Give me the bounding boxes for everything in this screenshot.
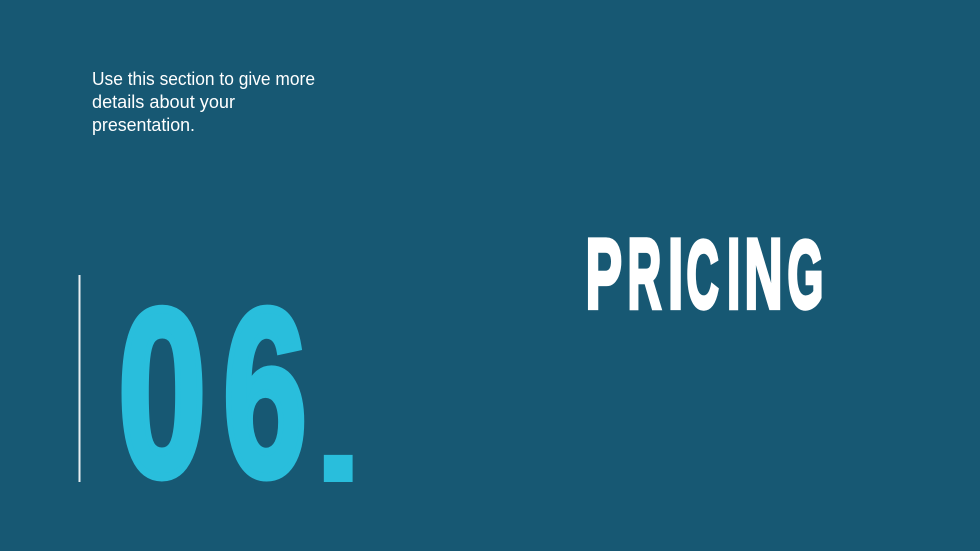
text block: section description: presentation.	[92, 115, 195, 135]
vertical divider line	[78, 275, 80, 482]
section number: 0	[118, 260, 206, 526]
section number	[118, 260, 367, 526]
heading: I	[727, 217, 740, 330]
section number: .	[310, 317, 367, 521]
section number: 6	[223, 261, 307, 526]
heading: C	[686, 220, 719, 328]
heading: P	[586, 219, 622, 330]
heading: I	[668, 219, 683, 330]
heading: N	[744, 218, 783, 329]
text block: section description: details about your	[92, 92, 235, 112]
heading	[586, 217, 823, 330]
text block: section description: Use this section to give more	[92, 69, 315, 89]
heading: G	[788, 221, 823, 328]
heading: R	[628, 220, 661, 330]
text block: section description	[92, 69, 315, 135]
